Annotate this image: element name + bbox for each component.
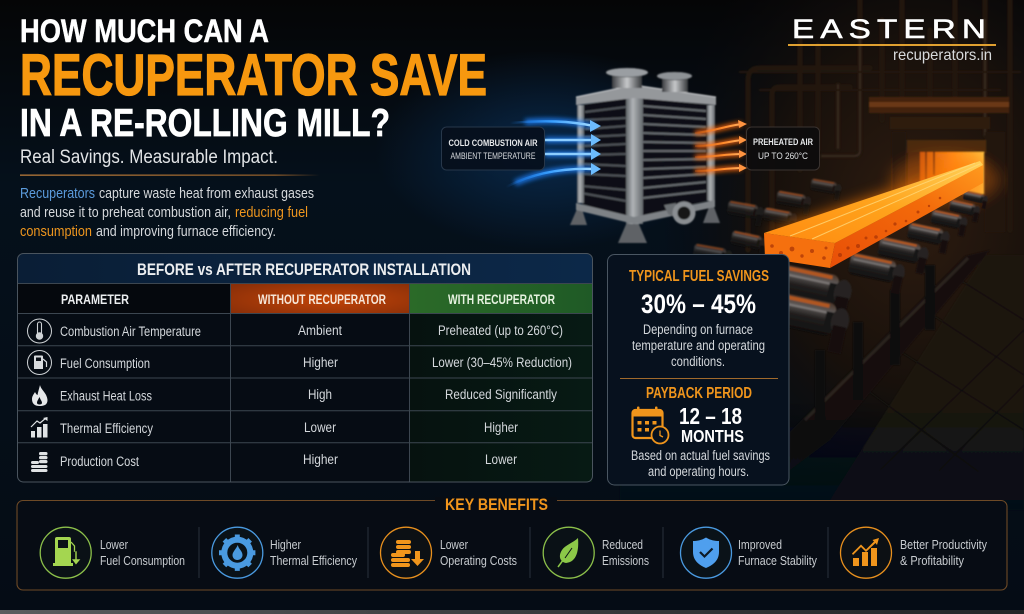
rollers — [691, 243, 734, 272]
flanges — [662, 79, 688, 92]
row: exhaust heat loss — [32, 385, 557, 406]
row: thermal efficiency — [31, 417, 518, 438]
callout: preheated air: PREHEATED AIR — [753, 137, 813, 148]
icon: shield with check — [680, 527, 732, 578]
row: exhaust heat loss: High — [308, 387, 332, 402]
title: IN A RE-ROLLING MILL? — [20, 102, 390, 145]
posts — [577, 105, 584, 203]
row: combustion air temperature — [28, 319, 563, 343]
roller rail — [790, 250, 990, 470]
top frame — [576, 85, 716, 105]
logo: recuperators.in — [893, 47, 992, 64]
heading: key benefits: KEY BENEFITS — [445, 496, 548, 514]
intro paragraph — [20, 186, 314, 240]
benefit: improved furnace stability — [680, 527, 818, 578]
icon: flame — [32, 385, 48, 406]
row: thermal efficiency: Higher — [484, 420, 518, 435]
callout: preheated air: UP TO 260°C — [758, 151, 808, 162]
table header: WITH RECUPERATOR — [448, 292, 555, 307]
benefit: better productivity and profitability: & Profitability — [900, 554, 965, 568]
benefit: higher thermal efficiency: Thermal Efficiency — [270, 554, 358, 568]
hot air arrows — [695, 120, 747, 172]
payback period: PAYBACK PERIOD — [646, 385, 752, 402]
pipes and structure — [740, 0, 1020, 250]
logo: EASTERN — [792, 14, 992, 44]
feet — [570, 207, 720, 243]
row: combustion air temperature: Ambient — [298, 323, 342, 338]
benefit: improved furnace stability: Furnace Stability — [738, 554, 818, 568]
side flange — [664, 203, 676, 218]
table header: WITHOUT RECUPERATOR — [258, 292, 386, 307]
intro paragraph: consumption — [20, 224, 92, 240]
benefit: lower operating costs: Operating Costs — [440, 554, 517, 568]
intro paragraph: Recuperators — [20, 186, 95, 202]
row: thermal efficiency: Lower — [304, 420, 336, 435]
benefit: reduced emissions: Emissions — [602, 554, 649, 568]
subtitle: Real Savings. Measurable Impact. — [20, 147, 278, 168]
table header: PARAMETER — [61, 292, 129, 307]
title: RECUPERATOR SAVE — [20, 43, 487, 108]
benefit: lower fuel consumption: Lower — [100, 538, 128, 552]
title — [20, 13, 487, 145]
row: fuel consumption: Higher — [303, 355, 338, 370]
payback period: MONTHS — [681, 426, 744, 446]
icon: thermometer — [28, 319, 52, 343]
payback period: Based on actual fuel savings — [631, 448, 770, 463]
intro paragraph: and reuse it to preheat combustion air, — [20, 205, 231, 221]
table title — [18, 254, 592, 283]
payback period: 12 – 18 — [679, 403, 742, 429]
intro paragraph: and improving furnace efficiency. — [96, 224, 276, 240]
factory scene background — [375, 0, 1024, 510]
payback period: and operating hours. — [648, 464, 749, 479]
payback period — [631, 385, 770, 479]
benefit: lower fuel consumption: Fuel Consumption — [100, 554, 185, 568]
benefit: better productivity and profitability: Better Productivity — [900, 538, 988, 552]
hot steel billet — [764, 160, 983, 268]
row: production cost — [31, 452, 517, 472]
recuperator unit — [570, 68, 720, 243]
typical fuel savings: conditions. — [671, 354, 725, 369]
icon: blue gear with flame — [212, 527, 263, 578]
intro paragraph: capture waste heat from exhaust gases — [99, 186, 314, 202]
title: HOW MUCH CAN A — [20, 13, 269, 49]
typical fuel savings — [629, 268, 769, 369]
icon: rising bar chart — [840, 527, 892, 578]
callout: cold combustion air: AMBIENT TEMPERATURE — [450, 151, 536, 161]
row: combustion air temperature: Preheated (up to 260°C) — [438, 323, 563, 338]
callout: cold combustion air: COLD COMBUSTION AIR — [448, 138, 538, 149]
row: exhaust heat loss: Reduced Significantly — [445, 387, 557, 402]
row: production cost: Production Cost — [60, 454, 139, 469]
row: thermal efficiency: Thermal Efficiency — [60, 421, 153, 436]
benefit: improved furnace stability: Improved — [738, 538, 782, 552]
panel: key benefits — [17, 496, 1007, 590]
typical fuel savings: TYPICAL FUEL SAVINGS — [629, 268, 769, 285]
row: production cost: Higher — [303, 452, 338, 467]
floor — [830, 255, 1024, 500]
row: production cost: Lower — [485, 452, 517, 467]
row: fuel consumption — [28, 350, 572, 374]
typical fuel savings: Depending on furnace — [643, 322, 753, 337]
row: exhaust heat loss: Exhaust Heat Loss — [60, 388, 152, 404]
callout: preheated air — [746, 127, 820, 170]
row: fuel consumption: Lower (30–45% Reduction) — [432, 355, 572, 370]
cold air arrows — [506, 120, 601, 187]
icon: green fuel pump — [40, 527, 91, 578]
logo — [788, 14, 996, 64]
intro paragraph: reducing fuel — [235, 205, 308, 221]
row: combustion air temperature: Combustion Air Temperature — [60, 324, 201, 339]
benefit: lower operating costs: Lower — [440, 538, 468, 552]
bottom frame — [576, 200, 715, 224]
benefit: lower fuel consumption — [40, 527, 185, 578]
panel: comparison table — [18, 254, 592, 482]
icon: fuel pump — [28, 350, 52, 374]
furnace — [869, 97, 1009, 113]
benefit: lower operating costs — [380, 527, 517, 578]
benefit: higher thermal efficiency: Higher — [270, 538, 301, 552]
benefit: higher thermal efficiency — [212, 527, 358, 578]
icon: leaf — [543, 527, 594, 578]
tube faces — [582, 98, 627, 218]
icon: calendar and clock — [632, 406, 668, 444]
icon: growth chart — [31, 417, 48, 438]
benefit: reduced emissions — [543, 527, 649, 578]
callout: cold combustion air — [442, 127, 544, 170]
icon: coin stacks — [31, 452, 48, 472]
benefit: better productivity and profitability — [840, 527, 988, 578]
typical fuel savings: temperature and operating — [632, 338, 765, 353]
typical fuel savings: 30% – 45% — [641, 289, 756, 319]
benefit: reduced emissions: Reduced — [602, 538, 643, 552]
row: fuel consumption: Fuel Consumption — [60, 356, 150, 371]
icon: coins with down arrow — [380, 527, 432, 578]
panel: savings and payback — [608, 254, 789, 485]
table header — [18, 283, 592, 313]
table title: BEFORE vs AFTER RECUPERATOR INSTALLATION — [137, 261, 471, 279]
